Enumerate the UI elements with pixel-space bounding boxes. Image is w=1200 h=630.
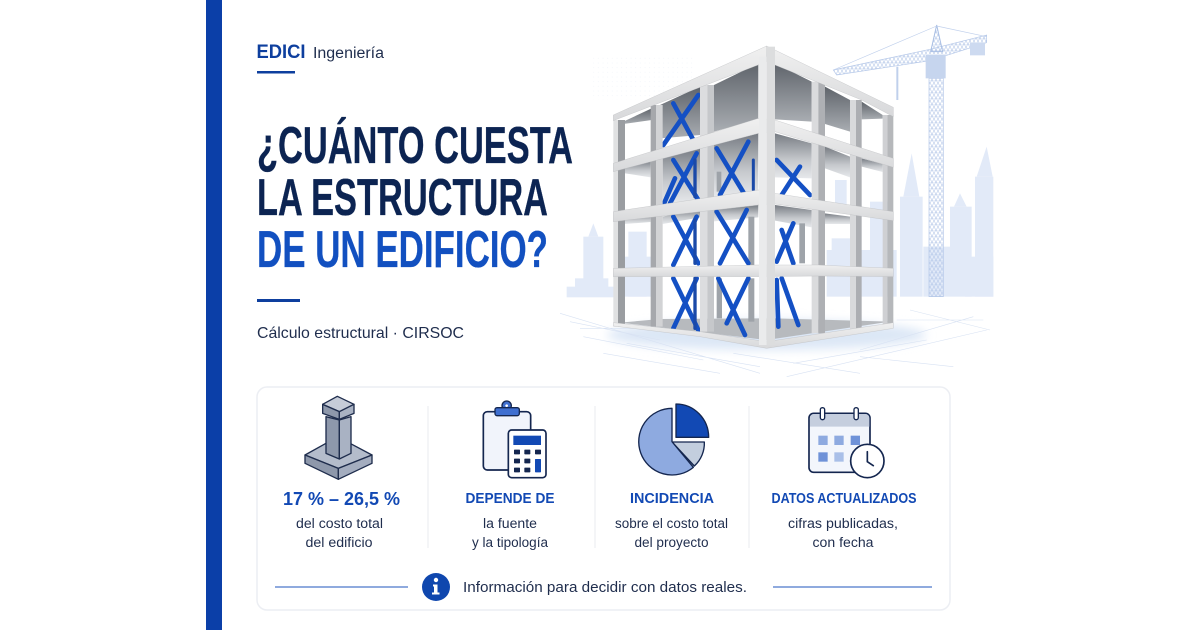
blue X braces: [663, 95, 810, 335]
title: LA ESTRUCTURA: [257, 169, 548, 227]
blueprint floor: [560, 310, 990, 377]
back columns: [717, 172, 805, 322]
icon: calendar and clock: [809, 408, 884, 478]
stats card: [257, 387, 950, 610]
column dividers: [428, 406, 749, 548]
stat: incidencia: INCIDENCIA: [630, 491, 715, 507]
ceilings: [623, 63, 883, 138]
footer note: Información para decidir con datos reales.: [463, 579, 747, 596]
title: DE UN EDIFICIO?: [257, 221, 548, 279]
dotted grid backdrop: [593, 57, 693, 100]
lower ceilings: [625, 133, 883, 227]
subtitle: Cálculo estructural · CIRSOC: [257, 325, 464, 342]
accent bar: [206, 0, 222, 630]
stat: datos actualizados: [772, 408, 917, 550]
stat: 17–26,5 %: 17 % – 26,5 %: [283, 488, 400, 509]
stat: datos actualizados: con fecha: [812, 535, 874, 550]
title divider: [257, 299, 300, 302]
floor slab: [620, 318, 890, 340]
illustration: building with crane and skyline: [560, 25, 993, 377]
concrete columns: [613, 82, 893, 333]
logo: EDICI Ingeniería: Ingeniería: [313, 45, 384, 62]
stat: depende de: la fuente: [483, 516, 537, 531]
title: [257, 117, 573, 279]
stat: incidencia: del proyecto: [634, 535, 708, 550]
stat: 17–26,5 %: [283, 396, 400, 550]
front column face over beams: [759, 57, 767, 345]
stat: 17–26,5 %: del edificio: [306, 535, 372, 550]
concrete beams: [613, 46, 893, 348]
stat: 17–26,5 %: del costo total: [296, 516, 383, 531]
stat: datos actualizados: DATOS ACTUALIZADOS: [772, 491, 917, 507]
icon: info: [422, 573, 450, 601]
stat: incidencia: [615, 404, 728, 550]
icon: column on footing: [305, 396, 372, 479]
tower crane: [833, 25, 987, 297]
skyline: [567, 147, 993, 297]
stat: depende de: [466, 401, 555, 550]
footer note: [275, 573, 932, 601]
icon: clipboard and calculator: [483, 401, 546, 478]
stat: depende de: DEPENDE DE: [466, 491, 555, 507]
stat: datos actualizados: cifras publicadas,: [788, 516, 898, 531]
stat: incidencia: sobre el costo total: [615, 516, 728, 531]
icon: pie chart: [639, 404, 709, 475]
title: ¿CUÁNTO CUESTA: [257, 117, 573, 175]
logo: EDICI Ingeniería: [256, 42, 384, 74]
logo: EDICI Ingeniería: EDICI: [256, 42, 306, 63]
stat: depende de: y la tipología: [472, 535, 548, 550]
